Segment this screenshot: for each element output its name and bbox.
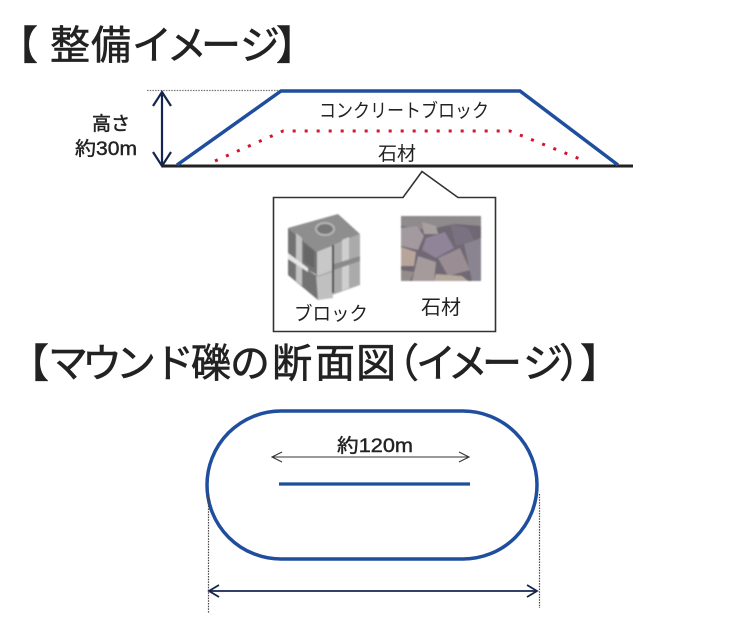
arrow: 120m <box>272 452 469 462</box>
title: development image: 【 整備イメージ】 <box>0 24 316 68</box>
inner boundary dotted line <box>215 131 580 161</box>
diagram: mound cross-section <box>75 90 633 166</box>
image: stones <box>401 216 481 281</box>
label: height about 30m <box>75 113 137 160</box>
ground line <box>162 164 633 168</box>
callout frame <box>274 172 496 332</box>
mound outline <box>177 91 618 165</box>
label: stone: 石材 <box>421 296 461 319</box>
side guide dotted lines <box>208 494 540 613</box>
stadium outline <box>207 411 537 559</box>
icon: concrete block <box>288 214 360 300</box>
label: height about 30m: 高さ <box>92 113 130 135</box>
diagram: plan view <box>207 411 540 613</box>
crest line <box>279 482 470 486</box>
callout: materials <box>274 172 496 332</box>
height guide dotted line <box>147 90 281 92</box>
label: about 120m: 約120m <box>337 435 413 457</box>
arrow: overall width <box>209 585 537 597</box>
label: concrete block: コンクリートブロック <box>319 99 489 122</box>
label: stone material: 石材 <box>378 143 416 165</box>
label: block: ブロック <box>294 302 368 325</box>
arrow: height <box>153 92 171 166</box>
label: height about 30m: 約30m <box>75 138 137 160</box>
title: mound rubble cross-section: 【マウンド礫の断面図（イメージ）】 <box>9 342 620 386</box>
